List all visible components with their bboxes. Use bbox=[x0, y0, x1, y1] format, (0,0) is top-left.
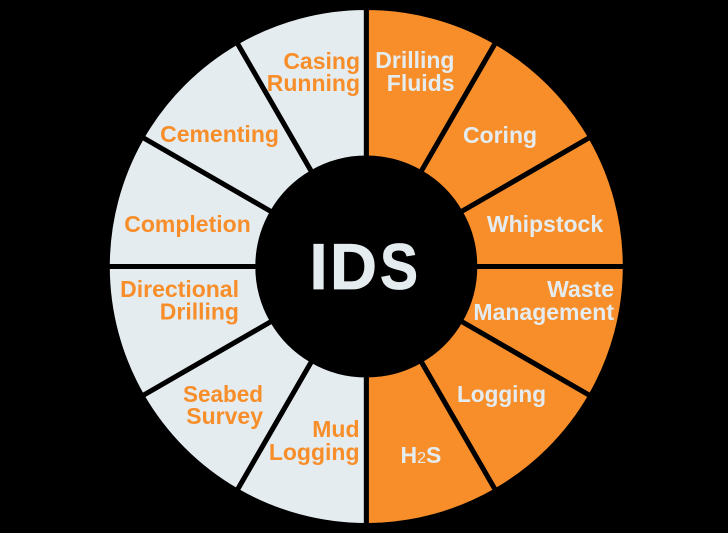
segment: Coring: Coring bbox=[463, 122, 537, 148]
segment: Seabed Survey bbox=[142, 321, 312, 491]
segment: Waste Management: Management bbox=[473, 299, 614, 325]
center title: IDS bbox=[310, 230, 418, 303]
center title: IDS: S bbox=[380, 230, 418, 303]
segment: Cementing: Cementing bbox=[160, 121, 279, 147]
segment: Whipstock bbox=[460, 137, 625, 266]
segment: Drilling Fluids bbox=[366, 8, 496, 173]
segment: Casing Running bbox=[237, 8, 366, 173]
segment: Mud Logging: Logging bbox=[269, 439, 360, 465]
segment: H2S bbox=[366, 360, 496, 526]
segment: Seabed Survey: Survey bbox=[186, 403, 263, 429]
segment: Waste Management bbox=[460, 266, 625, 396]
segment: Mud Logging: Mud bbox=[312, 416, 360, 442]
segment: H2S: H2S bbox=[400, 442, 441, 468]
segment: Coring bbox=[421, 42, 591, 212]
segment: Casing Running: Casing bbox=[283, 48, 360, 74]
segment: Whipstock: Whipstock bbox=[487, 211, 603, 237]
segment: Logging bbox=[421, 321, 591, 491]
segment: Directional Drilling: Directional bbox=[120, 276, 239, 302]
segment: Completion: Completion bbox=[124, 211, 251, 237]
segment: Completion bbox=[107, 137, 272, 266]
segment: Directional Drilling bbox=[107, 266, 272, 396]
segment: Drilling Fluids: Drilling bbox=[375, 47, 454, 73]
segment: Mud Logging bbox=[237, 360, 366, 526]
segment: Waste Management: Waste bbox=[547, 276, 614, 302]
center title: IDS: D bbox=[330, 230, 377, 303]
segment: Drilling Fluids: Fluids bbox=[387, 70, 454, 96]
segment: Casing Running: Running bbox=[267, 70, 360, 96]
segment: Seabed Survey: Seabed bbox=[183, 381, 263, 407]
segment: Directional Drilling: Drilling bbox=[160, 298, 239, 324]
center title: IDS: I bbox=[310, 230, 328, 303]
segment: Logging: Logging bbox=[457, 381, 546, 407]
segment: Cementing bbox=[142, 42, 312, 212]
